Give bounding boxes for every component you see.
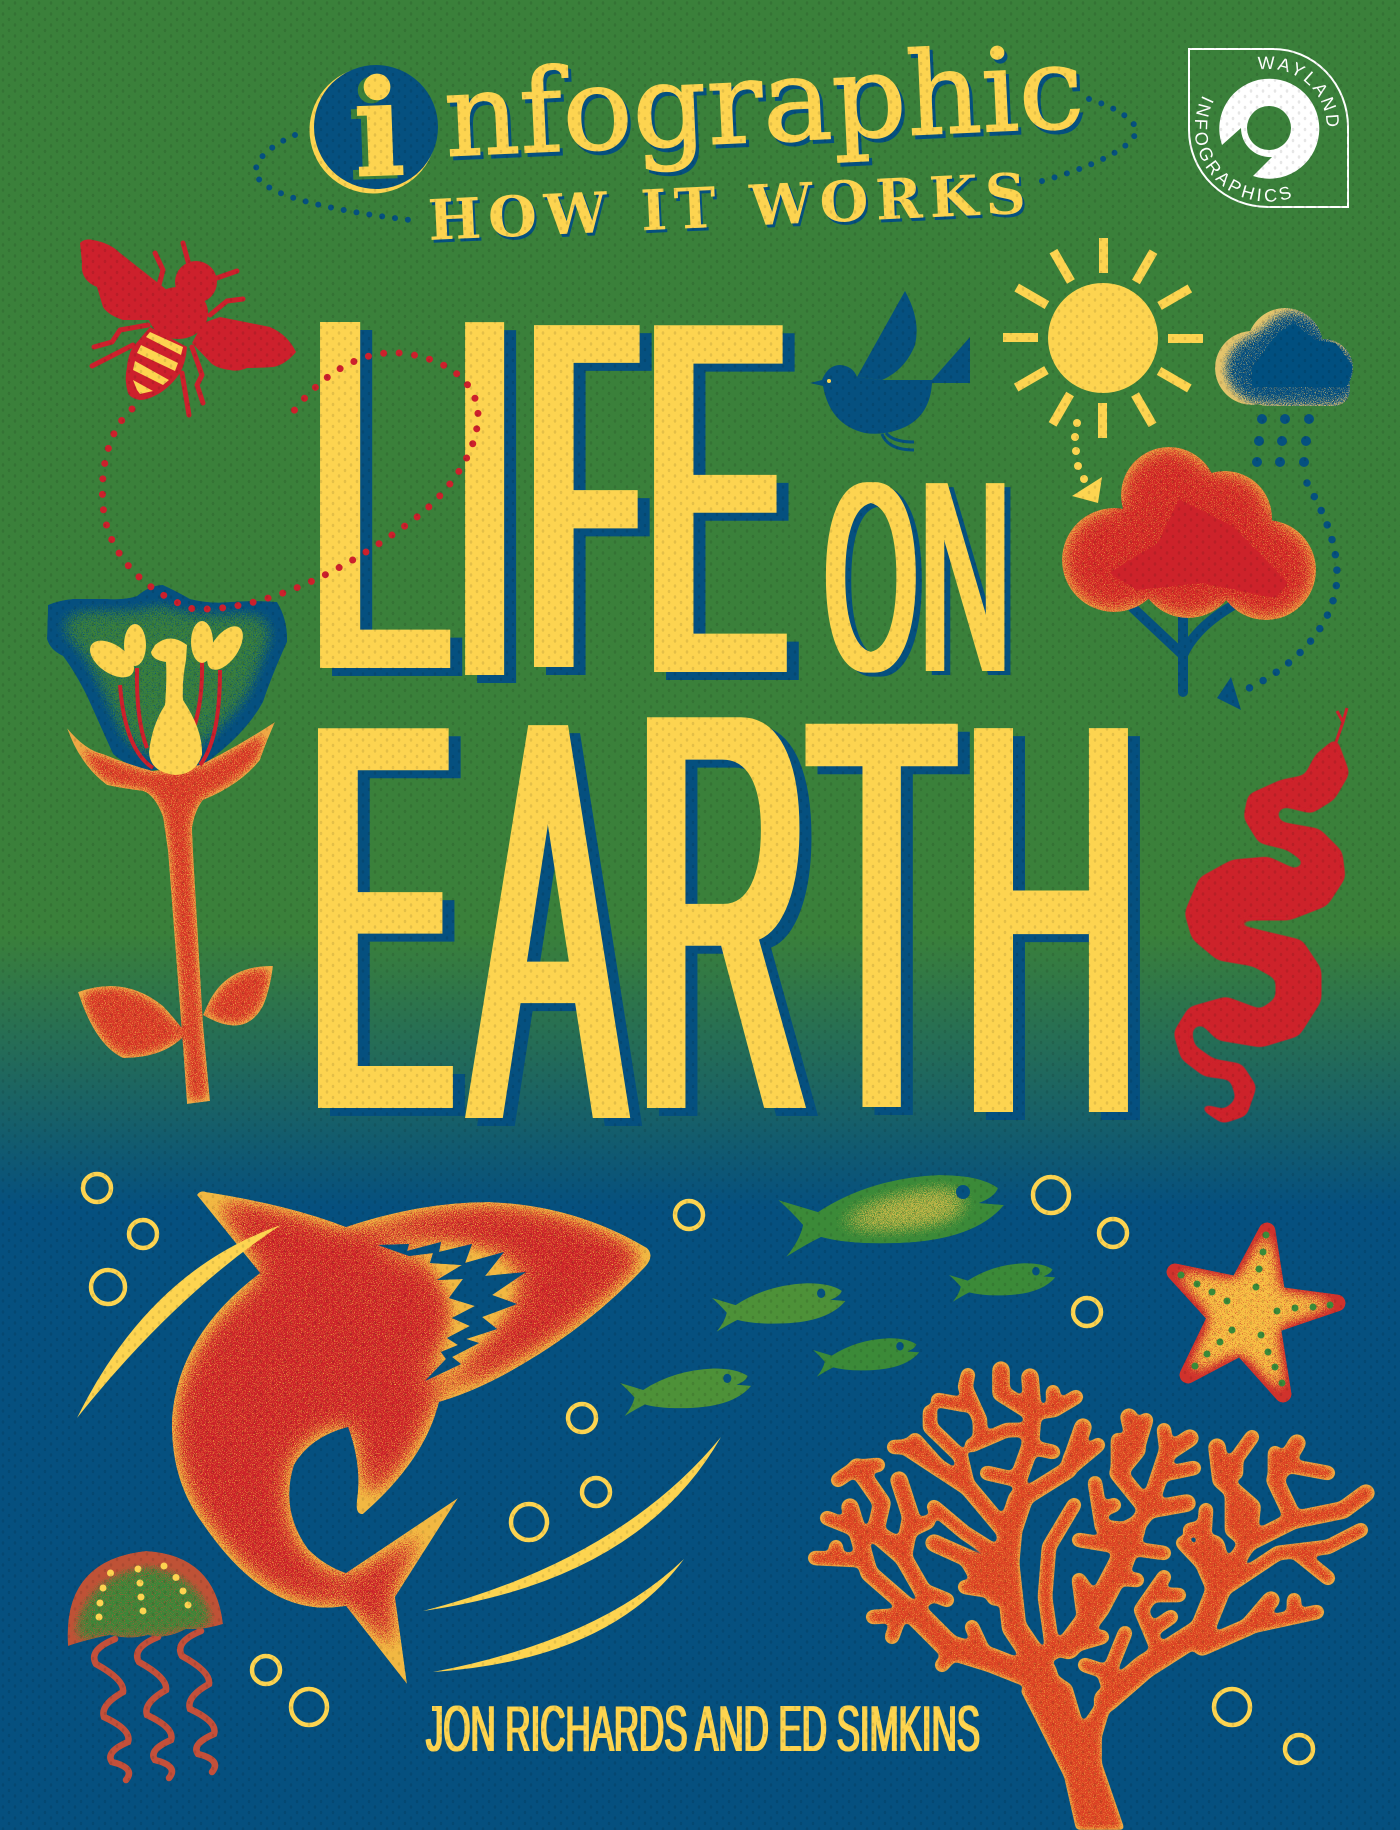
snake body — [1177, 743, 1346, 1120]
icon: cloud — [1215, 308, 1353, 406]
word LIFE: I — [450, 212, 519, 785]
flower petals — [47, 585, 287, 771]
big fish — [778, 1175, 1004, 1257]
dotted orbit around series logo — [256, 99, 1136, 221]
icon: bee — [80, 239, 296, 415]
icon: tree — [1062, 447, 1316, 692]
subtitle how it works: HOW IT WORKS — [427, 161, 1027, 254]
flower anthers — [83, 620, 250, 685]
icon: snake — [1177, 708, 1347, 1120]
starfish spots — [1178, 1232, 1334, 1386]
flower sepal, stem and leaves — [67, 722, 275, 1104]
word EARTH — [311, 595, 1140, 1239]
icon: shark — [172, 1191, 651, 1684]
word EARTH: R — [635, 595, 809, 1229]
fish 3 — [949, 1263, 1055, 1302]
ocean bubbles — [83, 1174, 1313, 1763]
bird legs — [882, 433, 914, 450]
word ON — [824, 425, 1011, 730]
bee legs — [92, 243, 243, 415]
yellow crescent and blue disc — [310, 65, 438, 194]
jellyfish tentacles — [94, 1631, 215, 1780]
coral branches — [815, 1370, 1366, 1700]
word LIFE: L — [307, 213, 451, 775]
word EARTH: E — [311, 608, 452, 1225]
icon: sun — [1003, 238, 1203, 438]
bird body and tail — [810, 337, 970, 434]
icon: coral — [815, 1370, 1366, 1830]
cloud core — [1252, 323, 1353, 387]
publisher badge: Wayland Infographics — [1188, 48, 1349, 208]
bird eye — [827, 379, 831, 383]
badge arc text — [1195, 56, 1339, 202]
jellyfish spots — [96, 1562, 192, 1620]
icon: bird — [810, 291, 970, 450]
icon: starfish — [1175, 1231, 1337, 1394]
subtitle how it works: HOW IT WORKS — [429, 164, 1029, 257]
snake tongue — [1335, 708, 1347, 745]
word nfographic: nfographic — [441, 21, 1087, 184]
motion swooshes — [77, 1225, 721, 1672]
dotted bee flight path — [102, 353, 478, 609]
icon: rain — [1252, 414, 1314, 467]
icon: flower — [47, 585, 287, 1104]
bee stripes — [133, 332, 183, 394]
bird wing — [857, 291, 917, 380]
word ON: N — [919, 425, 1011, 730]
word LIFE: F — [532, 217, 634, 773]
word LIFE: E — [647, 216, 786, 779]
tree crown core — [1109, 499, 1288, 598]
flower stamen filaments — [120, 662, 220, 768]
badge swirl — [1219, 79, 1319, 179]
bee body — [126, 261, 217, 400]
series logo: infographic how it works — [256, 21, 1136, 257]
word EARTH: T — [808, 603, 955, 1225]
fish 4 — [813, 1338, 919, 1377]
bee wings — [80, 239, 296, 371]
jellyfish dome — [68, 1551, 223, 1646]
starfish body — [1175, 1231, 1337, 1394]
word nfographic: nfographic — [444, 25, 1090, 188]
word ON: O — [824, 427, 918, 728]
letter i: i — [345, 54, 401, 211]
school of fish — [620, 1175, 1055, 1416]
tree crown — [1062, 447, 1316, 620]
word EARTH: H — [962, 608, 1140, 1231]
word LIFE — [307, 212, 786, 785]
cloud body — [1215, 308, 1353, 406]
letter i: i — [351, 51, 407, 208]
badge arc text: INFOGRAPHICS — [1195, 96, 1291, 202]
fish 2 — [712, 1283, 845, 1332]
coral trunk — [1020, 1670, 1130, 1830]
badge arc text: WAYLAND — [1258, 56, 1339, 126]
tree trunk — [1133, 606, 1232, 692]
word EARTH: A — [473, 601, 624, 1239]
title: Life on Earth — [307, 212, 1140, 1239]
arrow: sun to tree — [1071, 419, 1102, 503]
badge outline — [1189, 49, 1348, 207]
icon: jellyfish — [68, 1551, 223, 1780]
flower pistil — [149, 638, 202, 775]
fish 5 — [620, 1368, 751, 1416]
arrow: rain to tree roots — [1217, 483, 1337, 710]
